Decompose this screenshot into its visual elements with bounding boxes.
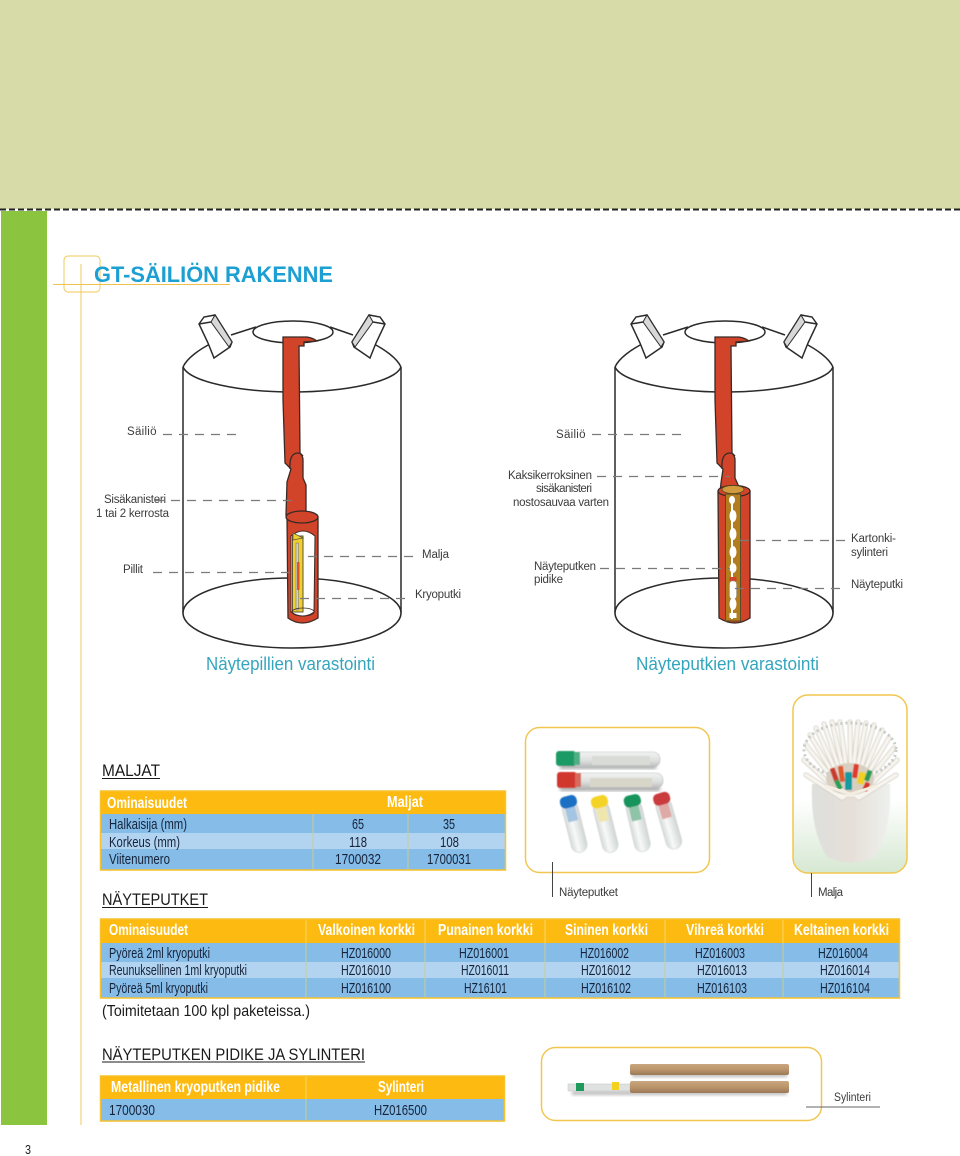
caption: näyteputket bbox=[552, 862, 619, 899]
note: package size: (Toimitetaan 100 kpl paketeissa.) bbox=[102, 1003, 310, 1020]
callouts: tube storage: Näyteputki bbox=[851, 579, 903, 591]
table: pidike ja sylinteri: Metallinen kryoputken pidike bbox=[111, 1079, 280, 1096]
heading: maljat: MALJAT bbox=[102, 761, 160, 780]
table: näyteputket: HZ016012 bbox=[581, 962, 631, 979]
long tube with green cap bbox=[556, 751, 660, 769]
caption: straw storage: Näytepillien varastointi bbox=[206, 654, 375, 674]
long tube with red cap bbox=[557, 772, 663, 791]
lifting rod bbox=[715, 337, 749, 492]
fanned straws bbox=[804, 722, 897, 798]
table: näyteputket: Pyöreä 2ml kryoputki bbox=[109, 945, 210, 962]
callouts: tube storage: sylinteri bbox=[851, 547, 888, 559]
table: maljat: 1700031 bbox=[427, 851, 471, 868]
caption: malja: Malja bbox=[818, 887, 844, 899]
callouts: straw storage: Kryoputki bbox=[415, 589, 461, 601]
table: näyteputket: HZ016013 bbox=[697, 962, 747, 979]
table: näyteputket: HZ016100 bbox=[341, 980, 391, 997]
callouts: straw storage bbox=[96, 426, 461, 601]
callouts: tube storage: Kaksikerroksinen bbox=[508, 470, 592, 482]
canister with straws bbox=[286, 511, 318, 623]
callouts: tube storage bbox=[508, 429, 903, 591]
table: näyteputket: Reunuksellinen 1ml kryoputki bbox=[109, 962, 247, 979]
table: maljat: 35 bbox=[443, 816, 455, 833]
tank shell bbox=[615, 315, 833, 648]
title with decorative frame: GT-SÄILIÖN RAKENNE bbox=[94, 262, 333, 287]
callouts: straw storage: Malja bbox=[422, 549, 450, 561]
table: näyteputket: HZ016102 bbox=[581, 980, 631, 997]
top band bbox=[0, 0, 960, 209]
photo panel: canister with straws bbox=[793, 695, 907, 873]
lifting rod bbox=[283, 337, 317, 515]
table: näyteputket: HZ16101 bbox=[464, 980, 507, 997]
table: näyteputket: Vihreä korkki bbox=[686, 922, 764, 939]
callouts: straw storage: Sisäkanisteri bbox=[104, 494, 166, 506]
caption: näyteputket: Näyteputket bbox=[559, 887, 619, 899]
table: näyteputket: HZ016104 bbox=[820, 980, 870, 997]
table: maljat: 118 bbox=[349, 834, 367, 851]
table: maljat: Korkeus (mm) bbox=[109, 834, 180, 851]
callouts: straw storage: Pillit bbox=[123, 564, 144, 576]
callouts: straw storage: 1 tai 2 kerrosta bbox=[96, 508, 170, 520]
caption: tube storage: Näyteputkien varastointi bbox=[636, 654, 819, 674]
table: maljat: 65 bbox=[352, 816, 364, 833]
caption: sylinteri: Sylinteri bbox=[834, 1092, 871, 1104]
table: maljat: Ominaisuudet bbox=[107, 795, 187, 812]
diagram: tube storage tank bbox=[508, 315, 903, 674]
table: näyteputket: Keltainen korkki bbox=[794, 922, 889, 939]
table: näyteputket: HZ016010 bbox=[341, 962, 391, 979]
callouts: tube storage: Säiliö bbox=[556, 429, 586, 441]
table: maljat: Maljat bbox=[387, 794, 424, 811]
title with decorative frame bbox=[53, 256, 333, 1125]
green side bar bbox=[1, 211, 47, 1125]
table: maljat bbox=[100, 791, 506, 870]
table: näyteputket: Pyöreä 5ml kryoputki bbox=[109, 980, 208, 997]
table: näyteputket: HZ016004 bbox=[818, 945, 868, 962]
callouts: tube storage: pidike bbox=[534, 574, 563, 586]
jar body bbox=[812, 784, 890, 862]
callouts: tube storage: sisäkanisteri bbox=[536, 483, 592, 495]
callouts: tube storage: Kartonki- bbox=[851, 533, 896, 545]
table: näyteputket: HZ016011 bbox=[461, 962, 509, 979]
cardboard cylinder, upper bbox=[630, 1064, 789, 1077]
heading: näyteputken pidike ja sylinteri: NÄYTEPUTKEN PIDIKE JA SYLINTERI bbox=[102, 1045, 365, 1064]
table: maljat: 1700032 bbox=[335, 851, 381, 868]
photo panel: cylinders bbox=[542, 1048, 822, 1120]
table: maljat: Halkaisija (mm) bbox=[109, 816, 187, 833]
four short vials bbox=[559, 791, 684, 854]
caption: sylinteri bbox=[806, 1092, 880, 1107]
table: näyteputket: HZ016001 bbox=[459, 945, 509, 962]
table: näyteputket: HZ016103 bbox=[697, 980, 747, 997]
table: näyteputket: HZ016014 bbox=[820, 962, 870, 979]
table: näyteputket: Ominaisuudet bbox=[109, 922, 188, 939]
diagram: straw storage tank bbox=[96, 315, 461, 674]
canister with cardboard cylinder and tubes bbox=[718, 486, 750, 623]
holder with cylinder, lower bbox=[568, 1081, 789, 1095]
callouts: straw storage: Säiliö bbox=[127, 426, 157, 438]
table: näyteputket: HZ016002 bbox=[580, 945, 629, 962]
table: näyteputket: Valkoinen korkki bbox=[318, 922, 415, 939]
table: näyteputket: Sininen korkki bbox=[565, 922, 648, 939]
tank shell bbox=[183, 315, 401, 648]
table: maljat: Viitenumero bbox=[109, 851, 170, 868]
coloured straw tips bbox=[826, 763, 874, 795]
table: pidike ja sylinteri: Sylinteri bbox=[378, 1079, 424, 1096]
callouts: tube storage: nostosauvaa varten bbox=[513, 497, 609, 509]
table: näyteputket bbox=[100, 919, 900, 998]
table: pidike ja sylinteri: HZ016500 bbox=[374, 1102, 427, 1119]
table: näyteputket: HZ016000 bbox=[341, 945, 391, 962]
photo panel: sample tubes bbox=[526, 728, 710, 872]
heading: näyteputket: NÄYTEPUTKET bbox=[102, 890, 208, 909]
table: näyteputket: Punainen korkki bbox=[438, 922, 533, 939]
caption: malja bbox=[812, 873, 844, 899]
callouts: tube storage: Näyteputken bbox=[534, 561, 596, 573]
table: näyteputket: HZ016003 bbox=[695, 945, 745, 962]
table: pidike ja sylinteri bbox=[100, 1076, 504, 1121]
table: maljat: 108 bbox=[440, 834, 459, 851]
table: pidike ja sylinteri: 1700030 bbox=[109, 1102, 155, 1119]
